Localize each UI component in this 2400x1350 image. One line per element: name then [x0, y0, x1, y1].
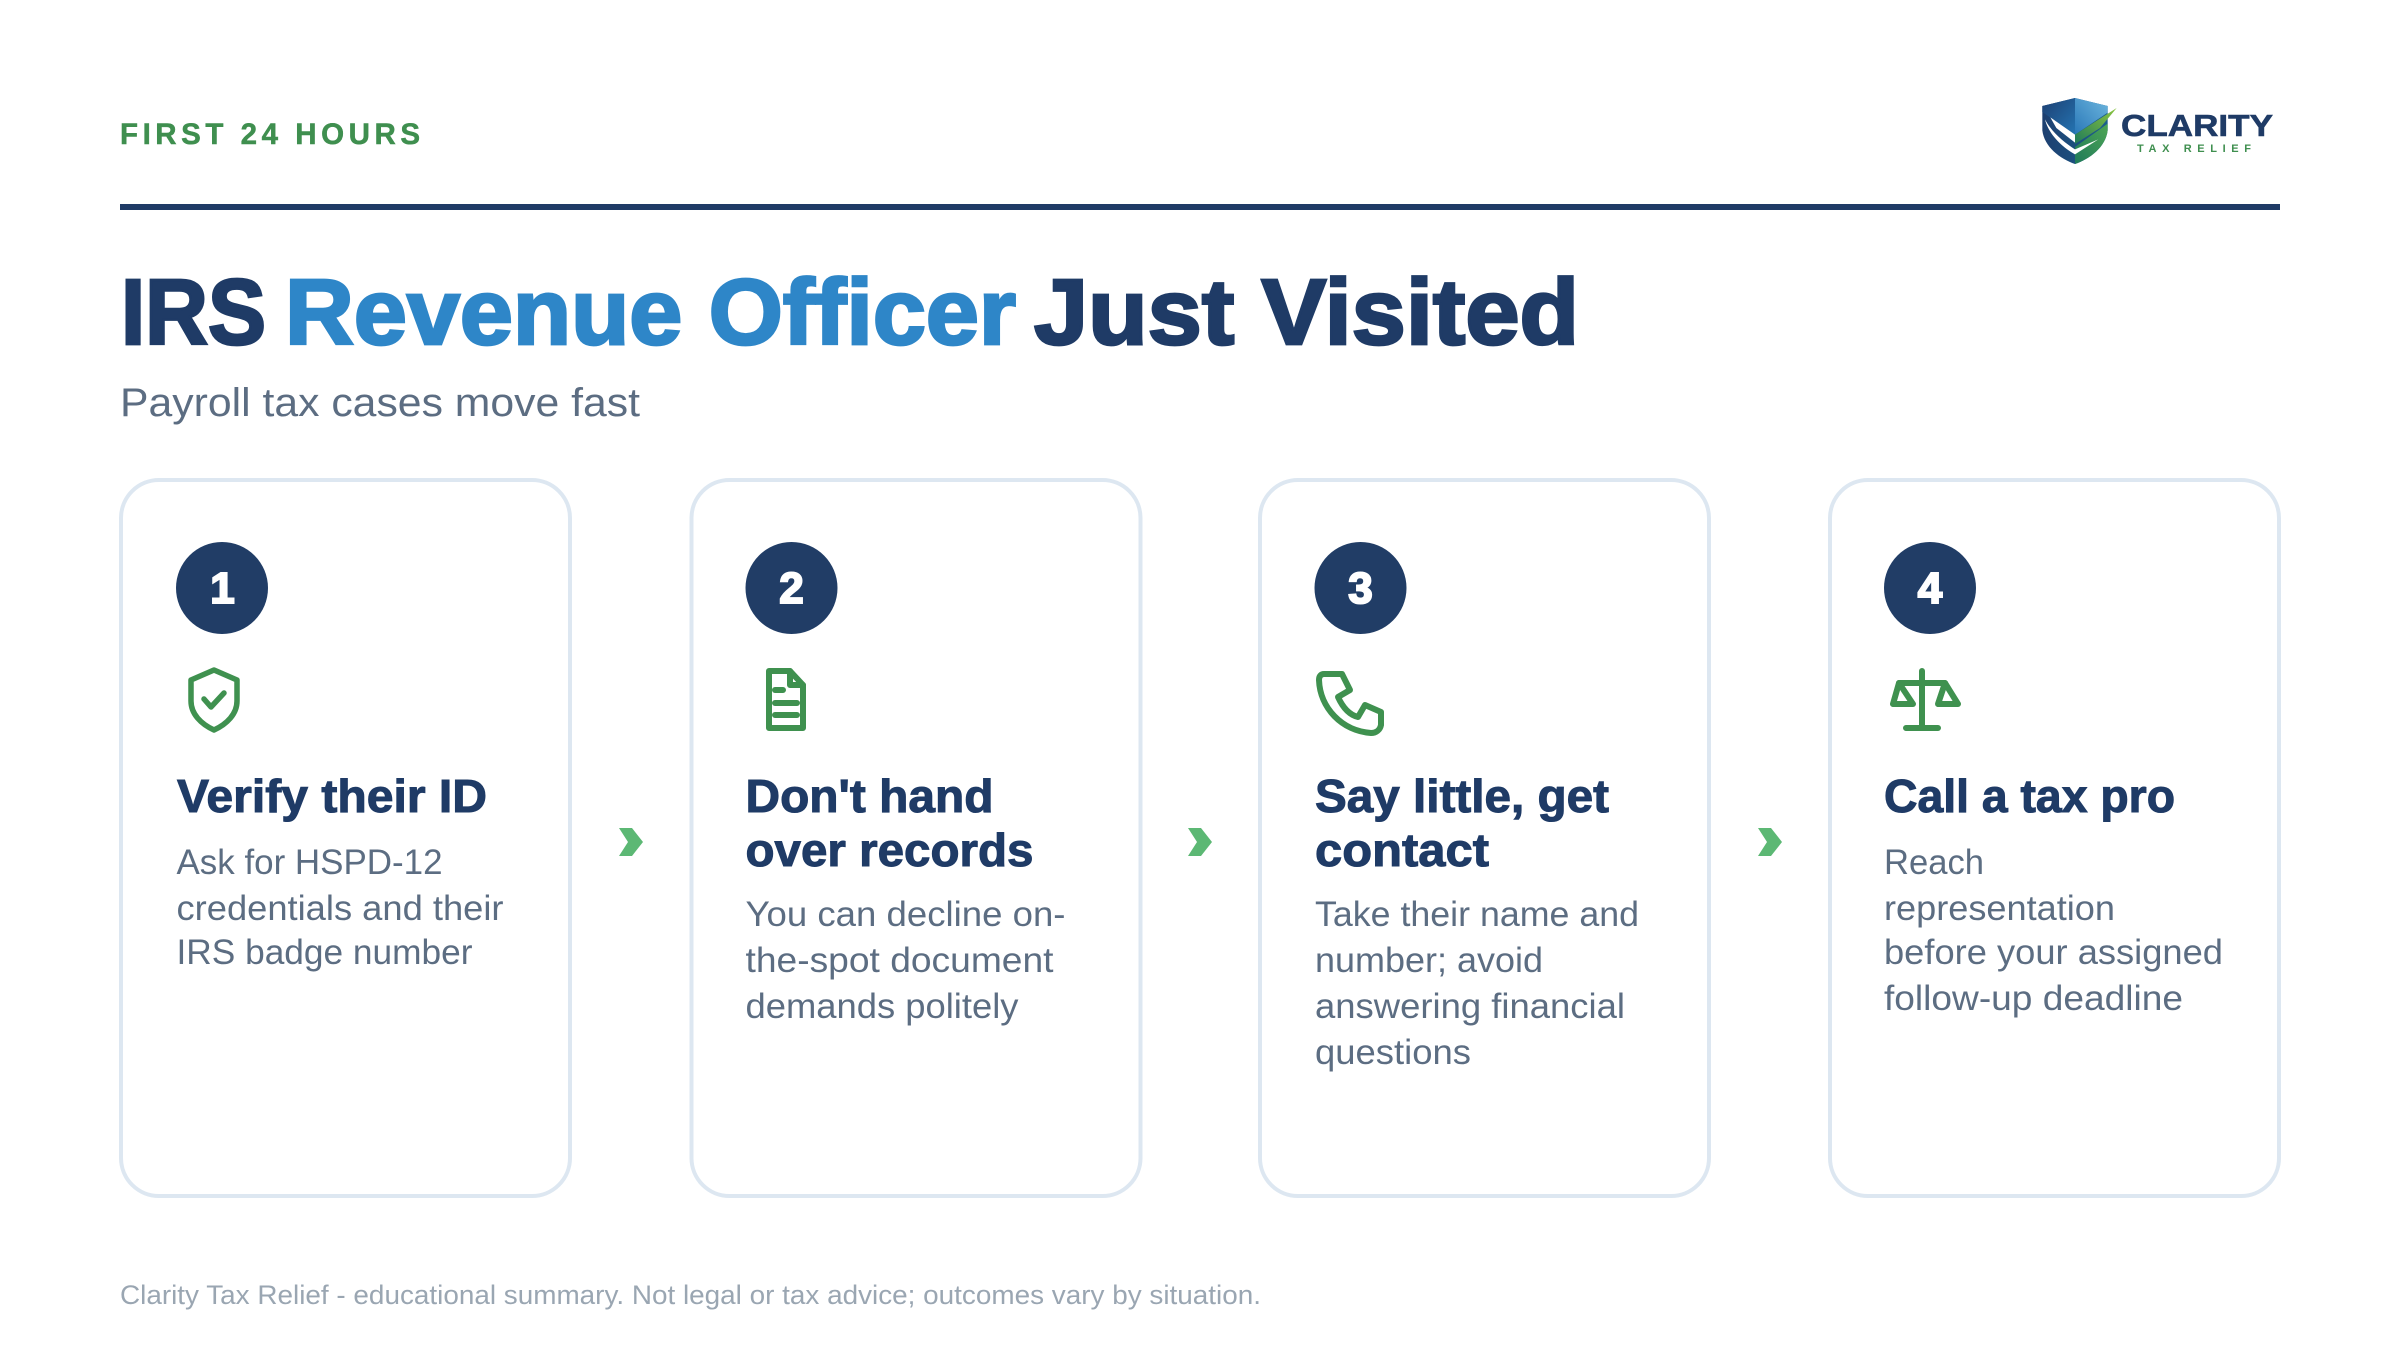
- panel: step 4 call a tax pro: [1830, 480, 2279, 1196]
- heading: don't hand over records: Don't hand: [746, 770, 994, 822]
- panel: step 2 don't hand over records: [692, 480, 1140, 1196]
- subtitle: Payroll tax cases move fast: [120, 381, 640, 425]
- title: [121, 260, 1579, 364]
- title: Revenue Officer: [285, 260, 1016, 364]
- step number 4: [1884, 542, 1976, 634]
- body text: [1884, 843, 2223, 1018]
- body text: the-spot document: [746, 941, 1054, 980]
- body text: demands politely: [746, 987, 1019, 1026]
- body text: [176, 843, 504, 972]
- step number 2: [746, 542, 838, 634]
- body text: before your assigned: [1884, 933, 2223, 972]
- icon: shield check: [191, 670, 237, 730]
- heading: verify their ID: Verify their ID: [177, 770, 487, 822]
- body text: questions: [1315, 1033, 1471, 1072]
- body text: Reach: [1884, 843, 1984, 882]
- step number 4: 4: [1918, 564, 1943, 613]
- step number 1: [176, 542, 268, 634]
- body text: answering financial: [1315, 987, 1625, 1026]
- logo tagline: TAX RELIEF: [2137, 143, 2251, 155]
- logo wordmark: CLARITY: [2121, 108, 2273, 143]
- panel: step 3 say little, get contact: [1260, 480, 1709, 1196]
- heading: say little, get contact: [1315, 770, 1609, 876]
- icon: scales: [1893, 671, 1958, 728]
- icon: shield mark: [2042, 98, 2117, 164]
- body text: number; avoid: [1315, 941, 1543, 980]
- panel: step 1 verify their ID: [121, 480, 570, 1196]
- arrow 2: [1188, 828, 1212, 856]
- heading: say little, get contact: Say little, get: [1315, 770, 1609, 822]
- logo: Clarity Tax Relief: [2042, 98, 2273, 164]
- body text: credentials and their: [176, 889, 504, 928]
- body text: IRS badge number: [176, 933, 473, 972]
- body text: representation: [1884, 889, 2115, 928]
- arrow 1: [619, 828, 643, 856]
- heading: don't hand over records: [746, 770, 1034, 876]
- step number 3: 3: [1348, 564, 1373, 613]
- icon: document: [769, 671, 803, 728]
- heading: say little, get contact: contact: [1315, 824, 1489, 876]
- body text: [746, 895, 1066, 1026]
- body text: [1315, 895, 1639, 1072]
- body text: follow-up deadline: [1884, 979, 2183, 1018]
- heading: don't hand over records: over records: [746, 824, 1034, 876]
- step number 2: 2: [779, 564, 804, 613]
- icon: phone: [1319, 674, 1381, 733]
- title: Just Visited: [1034, 260, 1579, 364]
- title: IRS: [121, 260, 266, 364]
- arrow 3: [1758, 828, 1782, 856]
- footer disclaimer: Clarity Tax Relief - educational summary. Not legal or tax advice; outcomes vary by situation.: [120, 1280, 1261, 1310]
- body text: You can decline on-: [746, 895, 1066, 934]
- heading: call a tax pro: Call a tax pro: [1884, 770, 2175, 822]
- step number 1: 1: [210, 564, 235, 613]
- body text: Take their name and: [1315, 895, 1639, 934]
- eyebrow: first 24 hours: FIRST 24 HOURS: [120, 118, 420, 151]
- body text: Ask for HSPD-12: [176, 843, 442, 882]
- step number 3: [1314, 542, 1406, 634]
